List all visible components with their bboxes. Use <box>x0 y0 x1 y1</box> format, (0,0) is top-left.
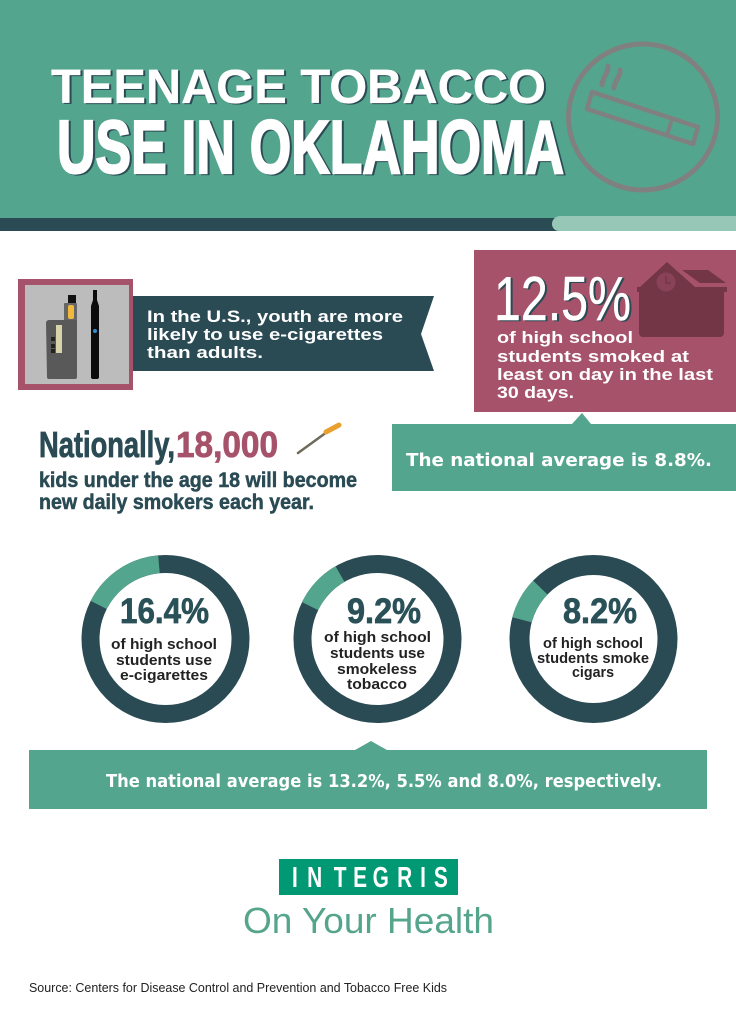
banner: e-cigarettes fact: likely to use e-cigarettes <box>147 325 383 344</box>
text: nationally 18,000: 18,000 <box>176 424 278 465</box>
text: smoked in last 30 days: least on day in the last <box>497 365 713 384</box>
heading: On Your Health: On Your Health <box>243 900 494 941</box>
chart: donut 16.4% e-cigarettes: of high school <box>111 636 217 653</box>
chart: donut 8.2% cigars: of high school <box>543 635 643 652</box>
callout: national average 8.8%: The national average is 8.8%. <box>406 450 712 471</box>
banner: e-cigarettes fact <box>133 296 434 371</box>
banner: e-cigarettes fact: In the U.S., youth are more <box>147 307 403 326</box>
logo: INTEGRIS: INTEGRIS <box>292 862 448 894</box>
icon: no smoking cigarette <box>568 44 718 190</box>
text: smoked in last 30 days: students smoked at <box>497 347 689 366</box>
text: nationally 18,000 <box>39 424 357 514</box>
icon: cigarette <box>298 425 339 453</box>
panel: header <box>0 0 736 231</box>
title: TEENAGE TOBACCO <box>51 61 546 114</box>
stat: 12.5%: 12.5% <box>494 265 631 334</box>
source note: Source: Centers for Disease Control and Prevention and Tobacco Free Kids <box>29 980 447 995</box>
chart: donut 8.2% cigars: cigars <box>572 664 614 681</box>
icon: school house <box>637 262 727 337</box>
text: smoked in last 30 days: of high school <box>497 328 633 347</box>
callout: national averages: The national average is 13.2%, 5.5% and 8.0%, respectively. <box>106 771 662 792</box>
chart: donut 8.2% cigars: 8.2% <box>563 592 637 631</box>
callout: national averages <box>29 741 707 809</box>
title <box>51 61 564 189</box>
chart: donut 8.2% cigars <box>520 565 668 713</box>
chart: donut 8.2% cigars: students smoke <box>537 650 649 667</box>
callout: national average 8.8% <box>392 413 736 491</box>
text: smoked in last 30 days <box>497 328 713 402</box>
panel: e-cigarette image <box>18 279 133 390</box>
chart: donut 9.2% smokeless tobacco: tobacco <box>347 676 407 693</box>
chart: donut 16.4% e-cigarettes: students use <box>116 652 212 669</box>
chart: donut 9.2% smokeless tobacco: 9.2% <box>347 592 421 631</box>
text: nationally 18,000: Nationally, <box>39 424 175 465</box>
chart: donut 9.2% smokeless tobacco: of high school <box>324 629 431 646</box>
text: nationally 18,000: kids under the age 18 will become <box>39 469 357 492</box>
chart: donut 9.2% smokeless tobacco: smokeless <box>337 661 417 678</box>
chart: donut 16.4% e-cigarettes: e-cigarettes <box>120 667 208 684</box>
text: nationally 18,000: new daily smokers each year. <box>39 491 314 514</box>
chart: donut 16.4% e-cigarettes: 16.4% <box>120 592 209 631</box>
panel: 12.5% statistic <box>474 250 736 412</box>
chart: donut 16.4% e-cigarettes <box>90 564 240 714</box>
chart: donut 9.2% smokeless tobacco: students use <box>330 645 425 662</box>
chart: donut 9.2% smokeless tobacco <box>302 564 452 714</box>
text: smoked in last 30 days: 30 days. <box>497 383 574 402</box>
banner: e-cigarettes fact: than adults. <box>147 343 263 362</box>
